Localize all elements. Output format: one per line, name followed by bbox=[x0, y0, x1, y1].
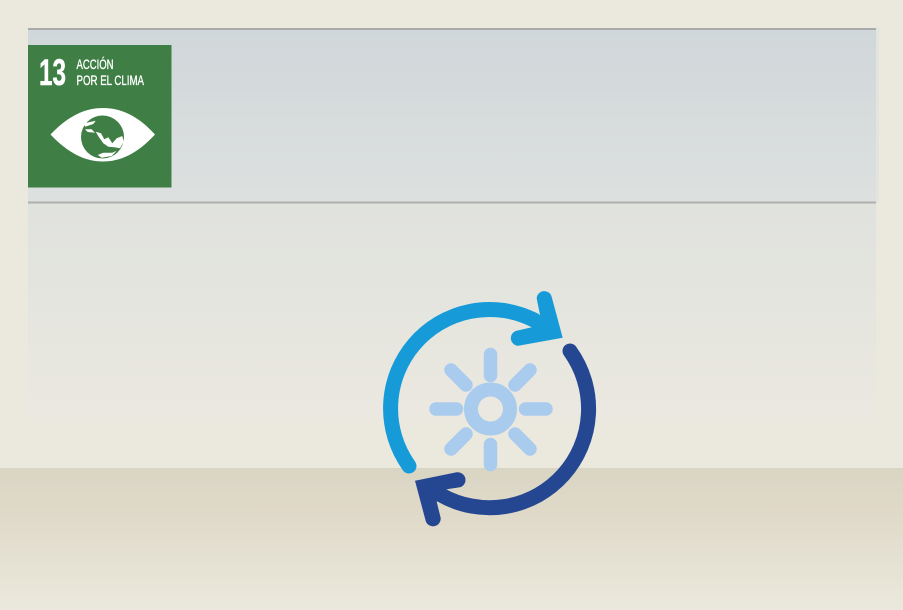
lower light panel bbox=[28, 204, 876, 422]
cycle icon bbox=[391, 291, 589, 526]
upper blue-grey panel bbox=[28, 27, 879, 204]
icon: sun bbox=[436, 354, 546, 464]
badge title: ACCIÓN bbox=[76, 56, 114, 72]
badge title bbox=[76, 56, 144, 88]
badge number: 13 bbox=[39, 52, 66, 93]
ground band bbox=[0, 468, 903, 610]
icon: light blue arrow bbox=[391, 291, 563, 466]
SDG 13 badge bbox=[28, 45, 172, 188]
icon: dark blue arrow bbox=[415, 351, 589, 526]
icon: eye with globe bbox=[50, 108, 155, 162]
badge title: POR EL CLIMA bbox=[76, 72, 144, 88]
